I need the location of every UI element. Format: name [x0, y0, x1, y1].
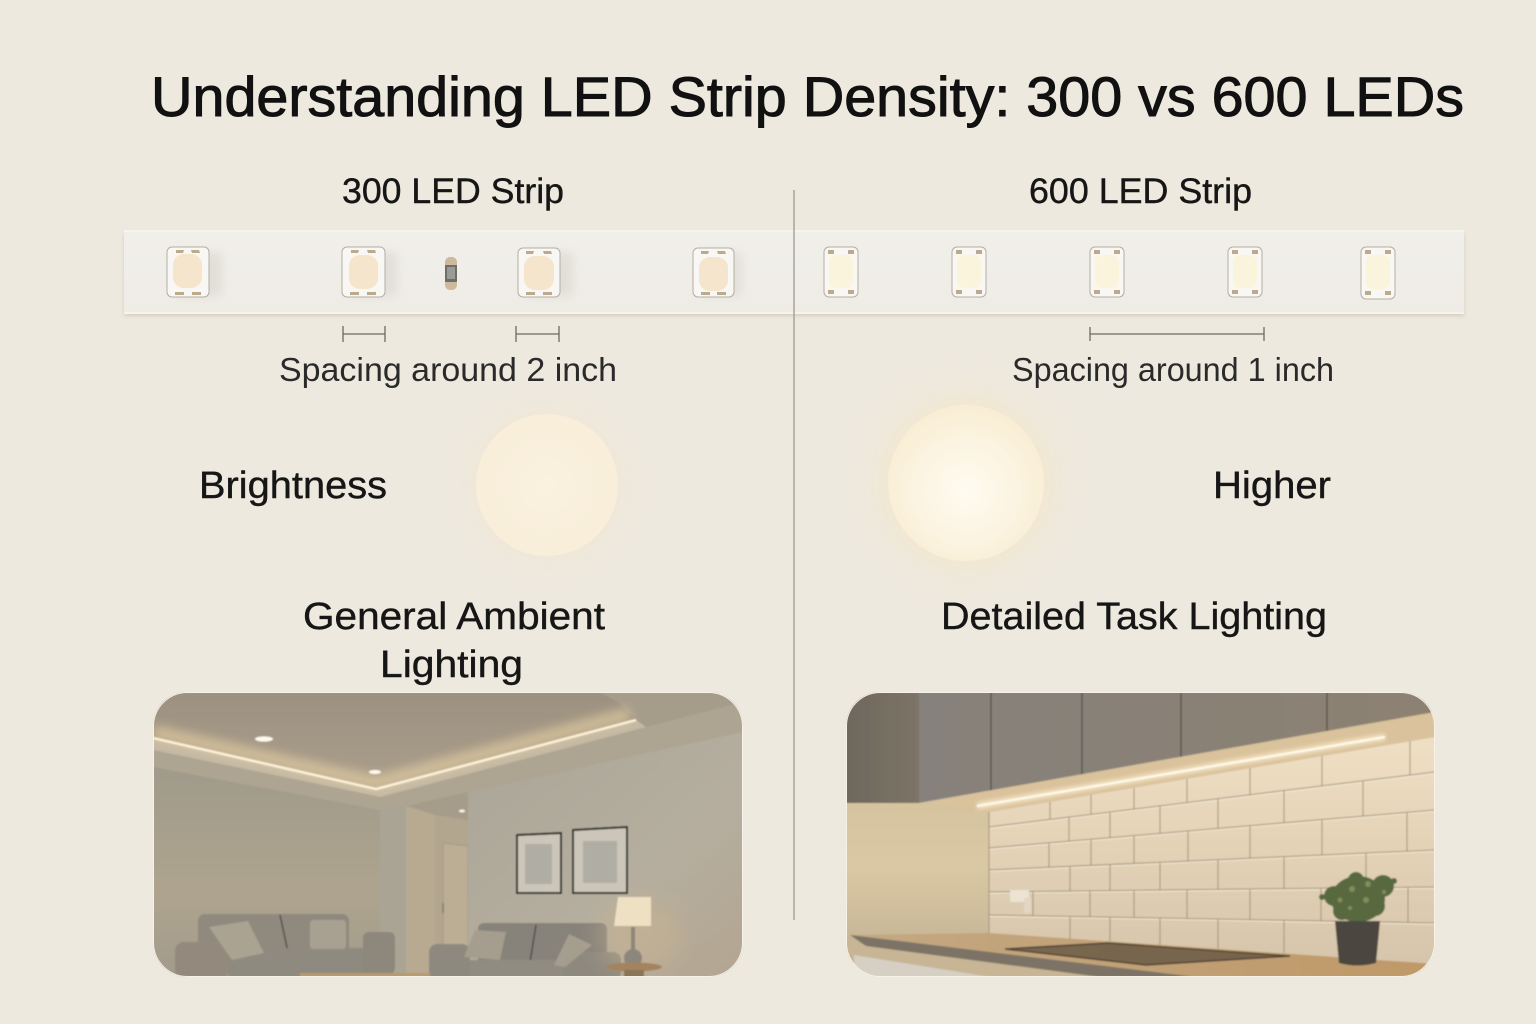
corridor and door	[380, 806, 468, 977]
LEDs: 300 strip	[167, 247, 742, 297]
wall outlet	[1010, 890, 1031, 913]
spacing brackets: 300 strip	[343, 326, 559, 342]
recessed downlights	[255, 736, 465, 812]
kitchen scene edge	[846, 692, 1434, 976]
under-cabinet panel	[919, 712, 1435, 812]
sofa left	[175, 914, 395, 980]
tray ceiling	[160, 693, 618, 711]
use label: general ambient lighting: Lighting	[380, 644, 523, 686]
LED strip band	[124, 230, 1464, 316]
brightness label: 600 strip: Higher	[1213, 465, 1331, 507]
spacing bracket: 600 strip	[1090, 327, 1264, 341]
scene: kitchen under-cabinet lighting	[846, 692, 1435, 977]
brightness label: 300 strip: Brightness	[199, 465, 387, 507]
upper cabinets	[919, 692, 1435, 803]
brightness glow circle: 600 strip	[882, 399, 1050, 567]
side wall	[846, 692, 989, 935]
backsplash tiles	[989, 737, 1435, 964]
heading: 600 LED Strip: 600 LED Strip	[1029, 172, 1252, 211]
sofa right	[429, 923, 621, 980]
floor	[300, 972, 430, 976]
countertop	[850, 933, 1435, 977]
spacing label: 300 strip: Spacing around 2 inch	[279, 351, 617, 388]
cove light glow	[153, 714, 636, 789]
left wall	[153, 767, 380, 977]
title: Understanding LED Strip Density: 300 vs 600 LEDs	[151, 65, 1464, 128]
room scene edge	[154, 692, 742, 976]
cooktop	[1005, 943, 1290, 965]
brightness glow circle: 300 strip	[471, 409, 623, 561]
right wall	[468, 732, 743, 977]
spacing label: 600 strip: Spacing around 1 inch	[1012, 351, 1334, 388]
LEDs: 600 strip	[824, 247, 1395, 299]
resistor component	[445, 257, 457, 290]
potted plant	[1319, 872, 1397, 966]
heading: 300 LED Strip: 300 LED Strip	[342, 172, 564, 211]
infographic canvas	[123, 75, 1465, 977]
light bar	[977, 737, 1385, 806]
use label: general ambient lighting: General Ambient	[303, 596, 605, 638]
use label: detailed task lighting: Detailed Task Lighting	[941, 596, 1327, 638]
scene: living room with cove lighting	[153, 692, 743, 980]
table lamp	[598, 897, 682, 978]
soffit bands	[156, 752, 408, 798]
center divider	[793, 190, 795, 920]
use label: general ambient lighting	[303, 596, 605, 686]
wall art frames	[517, 827, 627, 893]
